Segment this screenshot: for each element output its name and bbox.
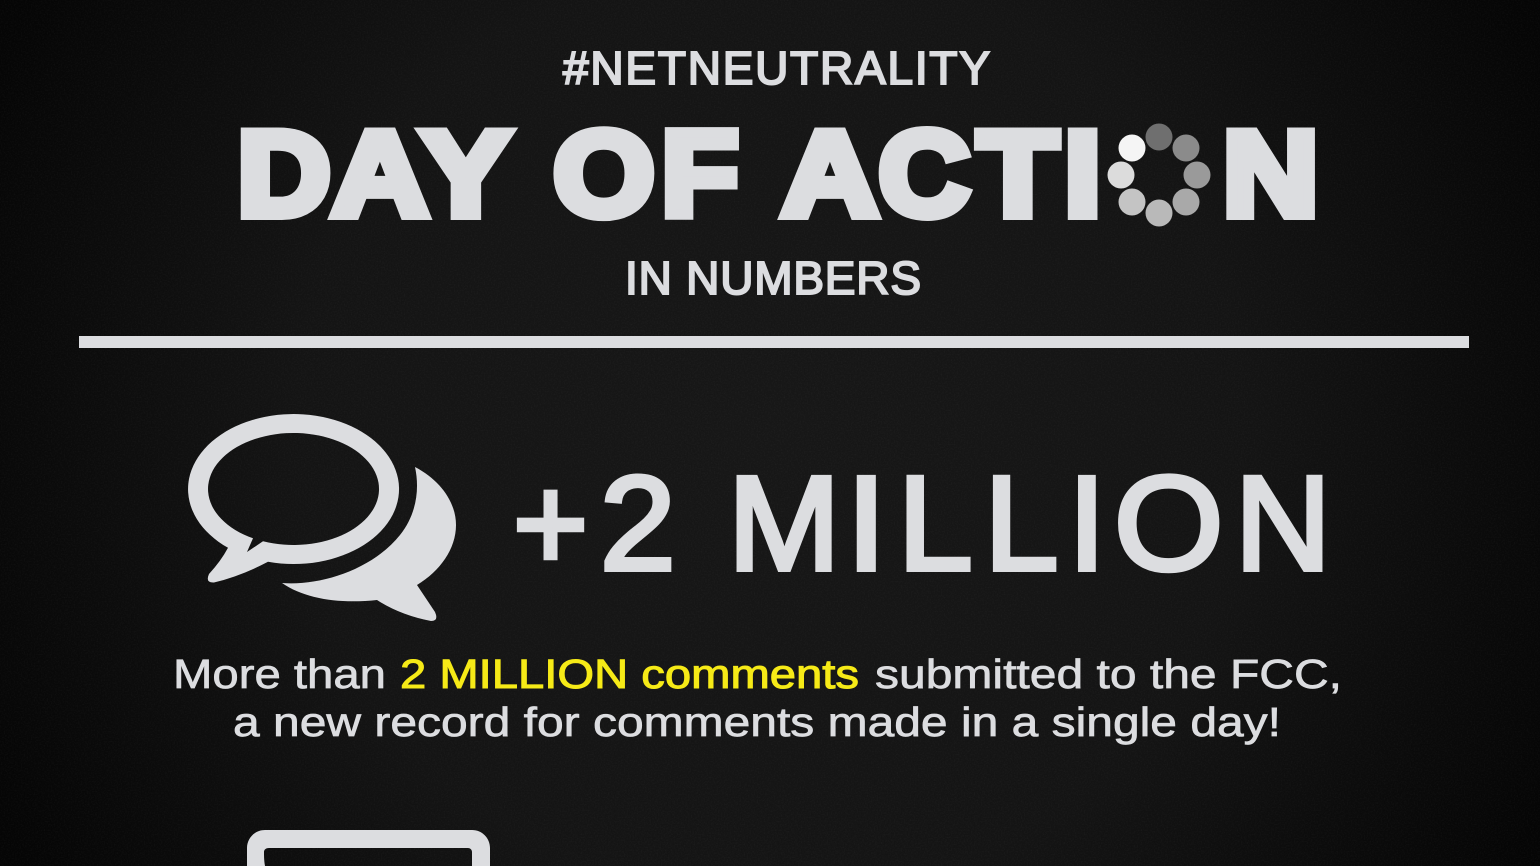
- title: day of action: N: [1223, 107, 1318, 241]
- front bubble outline: [188, 414, 399, 583]
- stat: +2 million: L: [984, 449, 1058, 599]
- stat: +2 million: +: [513, 448, 588, 598]
- title: day of action: Y: [421, 107, 511, 240]
- description text: [173, 651, 1342, 745]
- stat: +2 million: I: [1068, 448, 1106, 598]
- title: day of action: I: [1064, 106, 1101, 241]
- back bubble crescent: [282, 467, 456, 621]
- divider rule: [79, 336, 1469, 348]
- title: day of action: C: [879, 108, 970, 241]
- title: day of action: F: [662, 108, 738, 241]
- line 1: submitted to the FCC,: [875, 651, 1342, 697]
- stat: +2 million: 2: [600, 448, 676, 598]
- title: day of action: T: [978, 106, 1058, 241]
- line 2: a new record for comments made in a single day!: [233, 699, 1281, 745]
- title: day of action: A: [332, 106, 428, 241]
- stat: +2 million: O: [1114, 450, 1223, 599]
- subheading: in numbers: IN NUMBERS: [625, 252, 921, 304]
- title: day of action: [238, 106, 1318, 241]
- line 1: 2 MILLION comments: [400, 651, 859, 697]
- line 1: More than: [173, 651, 386, 697]
- title: day of action: D: [238, 107, 330, 241]
- stat: +2 million: M: [728, 449, 840, 598]
- icon: cropped device frame: [247, 830, 490, 866]
- hashtag heading: #NETNEUTRALITY: [563, 42, 990, 94]
- stat: +2 million: L: [898, 450, 973, 598]
- stat: +2 million: I: [846, 448, 887, 598]
- stat: +2 million: N: [1235, 449, 1331, 599]
- line 1: [173, 651, 1342, 697]
- icon: loading spinner as letter O: [1108, 124, 1210, 226]
- title: day of action: A: [782, 106, 878, 241]
- stat: +2 million: [513, 448, 1331, 599]
- title: day of action: O: [554, 107, 654, 241]
- icon: speech bubbles: [188, 414, 456, 621]
